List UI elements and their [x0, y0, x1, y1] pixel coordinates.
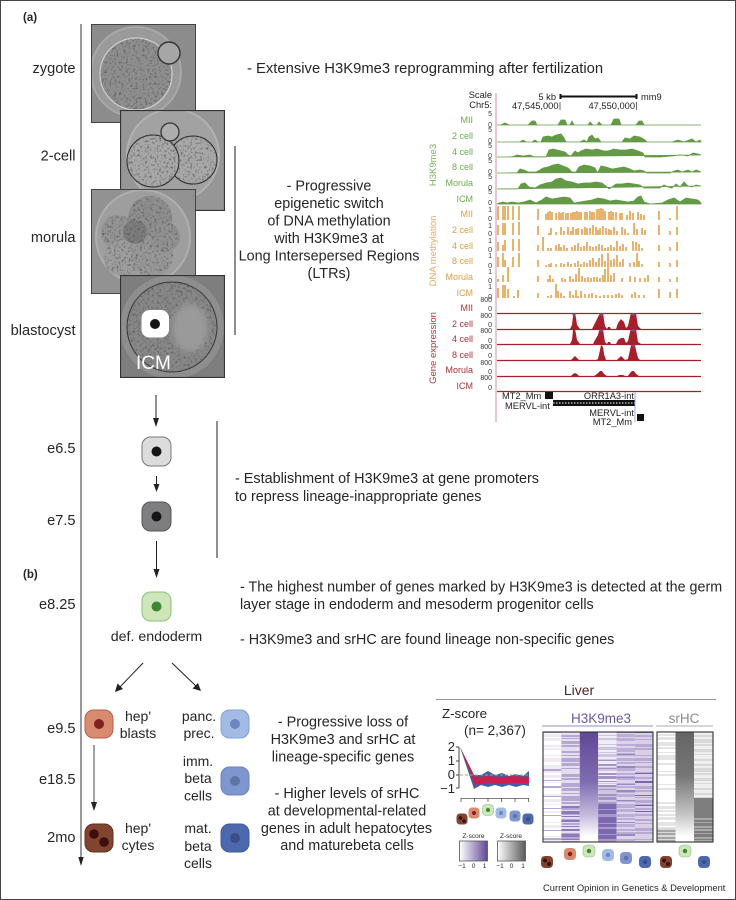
- heading: srHC: srHC: [669, 711, 700, 726]
- DNA methylation axis and labels: 1: [488, 269, 492, 276]
- cell: e6.5: [142, 437, 171, 466]
- H3K9me3 axis and labels: 0: [488, 122, 492, 129]
- arrow: to pancreatic: [172, 663, 201, 691]
- Z-score title: (n= 2,367): [464, 723, 526, 738]
- label: hep' blasts: hep': [125, 708, 151, 724]
- DNA methylation axis and labels: 0: [488, 216, 492, 223]
- label: def. endoderm: def. endoderm: [111, 629, 202, 645]
- text: epigenetic switch: epigenetic switch: [274, 196, 384, 212]
- gene expression axis and labels: 0: [488, 322, 492, 329]
- stage labels: 2mo: [47, 830, 76, 846]
- micrograph: zygote: [91, 24, 196, 123]
- text: germ layer: - H3K9me3 and srHC are found lineage non-specific genes: [240, 632, 614, 648]
- gene expression axis and labels: 0: [488, 338, 492, 345]
- DNA methylation axis and labels: 1: [488, 284, 492, 291]
- H3K9me3 axis and labels: Morula: [445, 178, 473, 188]
- icon: ICM cell: [142, 310, 169, 338]
- label: hep' blasts: [120, 708, 156, 741]
- stage labels: [11, 61, 76, 846]
- H3K9me3 axis and labels: 5: [488, 111, 492, 118]
- text: progressive loss: at developmental-related: [268, 804, 426, 820]
- Z-score line chart: 0: [448, 767, 455, 782]
- text: epigenetic switch: (LTRs): [308, 266, 350, 282]
- track group labels: H3K9me3: [428, 144, 439, 186]
- DNA methylation axis and labels: [445, 207, 492, 301]
- H3K9me3 axis and labels: 5: [488, 174, 492, 181]
- H3K9me3 axis and labels: 0: [488, 200, 492, 207]
- title: Liver: Liver: [564, 682, 595, 698]
- label: mat. beta cells: [184, 820, 212, 871]
- DNA methylation axis and labels: 1: [488, 207, 492, 214]
- gene expression axis and labels: 800: [480, 297, 492, 304]
- legend: gray Z-score: [496, 833, 526, 870]
- H3K9me3 axis and labels: [445, 111, 492, 207]
- gene expression axis and labels: 800: [480, 328, 492, 335]
- Z-score title: Z-score: [442, 706, 487, 721]
- DNA methylation axis and labels: 8 cell: [452, 256, 473, 266]
- text: progressive loss: H3K9me3 and srHC at: [271, 732, 415, 748]
- gene expression axis and labels: [445, 297, 492, 392]
- text: germ layer: [240, 580, 722, 648]
- arrow: e7.5 to e8.25: [154, 541, 160, 578]
- repeat annotation: [502, 391, 644, 427]
- rule under Liver: [436, 698, 716, 700]
- legend: purple Z-score: 0: [472, 863, 476, 870]
- gene expression axis and labels: Morula: [445, 365, 473, 375]
- text: epigenetic switch: Long Intersepersed Regions: [239, 248, 419, 264]
- stage cells under heatmaps: [541, 845, 710, 868]
- browser header: 5 kb: [538, 92, 556, 102]
- legend: purple Z-score: Z-score: [462, 833, 485, 840]
- H3K9me3 axis and labels: 0: [488, 138, 492, 145]
- stage labels: blastocyst: [11, 323, 76, 339]
- label: imm. beta cells: imm.: [183, 753, 213, 769]
- text: progressive loss: genes in adult hepatocytes: [261, 821, 432, 837]
- text: epigenetic switch: of DNA methylation: [267, 214, 391, 230]
- DNA methylation axis and labels: 4 cell: [452, 241, 473, 251]
- gene expression axis and labels: 800: [480, 360, 492, 367]
- repeat annotation: MERVL-int: [589, 408, 634, 418]
- H3K9me3 axis and labels: 2 cell: [452, 131, 473, 141]
- arrow: blastocyst to e6.5: [153, 395, 159, 427]
- legend: gray Z-score: Z-score: [500, 833, 522, 840]
- ICM label: ICM: [136, 353, 171, 374]
- micrograph: blastocyst with ICM: [120, 275, 225, 379]
- H3K9me3 axis and labels: MII: [460, 115, 473, 125]
- label: hep' cytes: [122, 820, 154, 853]
- small stage cells: [456, 804, 534, 824]
- Z-score line chart: 2: [448, 739, 455, 754]
- H3K9me3 axis and labels: 0: [488, 169, 492, 176]
- panel label: (a): (a): [23, 12, 37, 24]
- H3K9me3 axis and labels: 0: [488, 153, 492, 160]
- text: promoters: [235, 471, 539, 505]
- DNA methylation axis and labels: 0: [488, 263, 492, 270]
- text: epigenetic switch: [239, 178, 419, 282]
- cell: mature beta: [221, 824, 249, 852]
- DNA methylation axis and labels: 1: [488, 238, 492, 245]
- gene expression axis and labels: ICM: [456, 381, 473, 391]
- text: progressive loss: - Progressive loss of: [278, 714, 409, 730]
- legend: gray Z-score: −1: [496, 863, 504, 870]
- label: hep' cytes: cytes: [122, 837, 154, 853]
- H3K9me3 axis and labels: 4 cell: [452, 147, 473, 157]
- cell: hepatocyte: [85, 824, 113, 852]
- DNA methylation axis and labels: MII: [460, 209, 473, 219]
- stage labels: e8.25: [39, 597, 76, 613]
- label: hep' cytes: hep': [125, 820, 151, 836]
- legend: purple Z-score: −1: [458, 863, 466, 870]
- label: panc. prec.: [182, 708, 216, 741]
- heading: srHC: [656, 711, 713, 726]
- Z-score line chart: 1: [448, 753, 455, 768]
- H3K9me3 axis and labels: 8 cell: [452, 162, 473, 172]
- gene expression axis and labels: 800: [480, 313, 492, 320]
- legend: gray Z-score: 0: [510, 863, 514, 870]
- gene expression tracks: [570, 313, 641, 376]
- text: epigenetic switch: with H3K9me3 at: [273, 231, 384, 247]
- panel label: (b): (b): [23, 569, 38, 581]
- arrow: to hepatoblasts: [115, 663, 143, 692]
- DNA methylation axis and labels: 0: [488, 231, 492, 238]
- text: progressive loss: lineage-specific genes: [272, 750, 414, 766]
- legend: purple Z-score: 1: [483, 863, 487, 870]
- H3K9me3 axis and labels: 5: [488, 127, 492, 134]
- text: progressive loss: [261, 714, 432, 854]
- stage labels: e6.5: [47, 441, 76, 457]
- label: mat. beta cells: cells: [184, 855, 212, 871]
- text: promoters: - Establishment of H3K9me3 at gene promoters: [235, 471, 539, 487]
- gene expression axis and labels: 800: [480, 344, 492, 351]
- stage labels: morula: [31, 230, 76, 246]
- gene expression axis and labels: 800: [480, 375, 492, 382]
- cell: pancreatic progenitor: [221, 710, 249, 738]
- text: reprogramming: - Extensive H3K9me3 reprogramming after fertilization: [247, 61, 603, 77]
- label: panc. prec.: panc.: [182, 708, 216, 724]
- stage labels: zygote: [32, 61, 76, 77]
- H3K9me3 tracks: [497, 119, 701, 204]
- H3K9me3 axis and labels: 5: [488, 143, 492, 150]
- gene expression axis and labels: 0: [488, 306, 492, 313]
- track group labels: [428, 144, 439, 384]
- Z-score line chart: −1: [440, 781, 455, 796]
- caption: Current Opinion in Genetics & Development: [543, 882, 726, 893]
- legend: gray Z-score: 1: [521, 863, 525, 870]
- timeline arrow: [78, 24, 84, 866]
- label: hep' blasts: blasts: [120, 725, 156, 741]
- saturated peak tops: [572, 314, 636, 346]
- text: epigenetic switch: - Progressive: [287, 178, 371, 194]
- cell: hepatoblast: [85, 710, 113, 738]
- arrow: e6.5 to e7.5: [154, 476, 160, 492]
- divider bar: LTR text: [234, 146, 236, 335]
- DNA methylation axis and labels: ICM: [456, 288, 473, 298]
- DNA methylation axis and labels: 0: [488, 247, 492, 254]
- H3K9me3 axis and labels: 5: [488, 158, 492, 165]
- repeat annotation: MT2_Mm: [593, 417, 632, 427]
- Z-score line chart: [440, 739, 530, 802]
- H3K9me3 axis and labels: ICM: [456, 194, 473, 204]
- track group labels: Gene expression: [428, 312, 439, 384]
- DNA methylation axis and labels: Morula: [445, 272, 473, 282]
- label: mat. beta cells: beta: [184, 838, 212, 854]
- gene expression axis and labels: 8 cell: [452, 350, 473, 360]
- gene expression axis and labels: 2 cell: [452, 319, 473, 329]
- heatmap: H3K9me3: [543, 732, 653, 842]
- label: imm. beta cells: beta: [184, 770, 212, 786]
- browser header: 47,545,000: [512, 101, 558, 111]
- repeat annotation: MT2_Mm: [502, 391, 542, 401]
- text: promoters: to repress lineage-inappropriate genes: [235, 489, 481, 505]
- stage labels: e18.5: [39, 772, 76, 788]
- heading: H3K9me3: H3K9me3: [571, 711, 631, 726]
- label: imm. beta cells: cells: [184, 788, 212, 804]
- gene expression axis and labels: MII: [460, 303, 473, 313]
- micrograph: 2-cell: [120, 109, 225, 211]
- cell: definitive endoderm: [142, 592, 171, 621]
- DNA methylation axis and labels: 0: [488, 278, 492, 285]
- gene expression axis and labels: 0: [488, 353, 492, 360]
- heading: H3K9me3: [542, 711, 653, 726]
- text: progressive loss: and maturebeta cells: [280, 838, 414, 854]
- text: progressive loss: - Higher levels of srHC: [275, 786, 419, 802]
- DNA methylation axis and labels: 1: [488, 253, 492, 260]
- browser header: Scale: [469, 90, 492, 100]
- label: mat. beta cells: mat.: [184, 820, 212, 836]
- repeat annotation: ORR1A3-int: [584, 391, 634, 401]
- DNA methylation axis and labels: 0: [488, 294, 492, 301]
- H3K9me3 axis and labels: 5: [488, 189, 492, 196]
- DNA methylation axis and labels: 2 cell: [452, 225, 473, 235]
- stage labels: e9.5: [47, 721, 76, 737]
- cell: immature beta: [221, 767, 249, 795]
- gene expression axis and labels: 4 cell: [452, 334, 473, 344]
- stage labels: e7.5: [47, 513, 76, 529]
- arrow: hepatoblast to hepatocyte: [91, 745, 97, 811]
- divider bar: promoters: [216, 421, 218, 558]
- stage labels: 2-cell: [41, 148, 76, 164]
- browser header: mm9: [641, 92, 662, 102]
- browser header: Chr5:: [469, 100, 492, 110]
- Z-score title: [442, 706, 526, 738]
- browser header: [469, 90, 662, 422]
- heatmap: srHC: [657, 732, 713, 842]
- repeat annotation: MERVL-int: [505, 401, 550, 411]
- text: germ layer: layer stage in endoderm and mesoderm progenitor cells: [240, 597, 594, 613]
- H3K9me3 axis and labels: 0: [488, 185, 492, 192]
- legend: purple Z-score: [458, 833, 488, 870]
- track group labels: DNA methylation: [428, 216, 439, 286]
- label: panc. prec.: prec.: [183, 725, 215, 741]
- browser header: 47,550,000: [588, 101, 635, 111]
- genome browser panel: [428, 90, 701, 427]
- text: germ layer: - The highest number of genes marked by H3K9me3 is detected at the germ: [240, 580, 722, 596]
- gene expression baselines: [497, 314, 701, 392]
- gene expression axis and labels: 0: [488, 385, 492, 392]
- cell: e7.5: [142, 502, 171, 531]
- micrograph: morula: [91, 189, 196, 294]
- DNA methylation tracks: [498, 206, 677, 298]
- Liver panel: [436, 682, 716, 870]
- DNA methylation axis and labels: 1: [488, 223, 492, 230]
- gene expression axis and labels: 0: [488, 369, 492, 376]
- label: imm. beta cells: [183, 753, 213, 804]
